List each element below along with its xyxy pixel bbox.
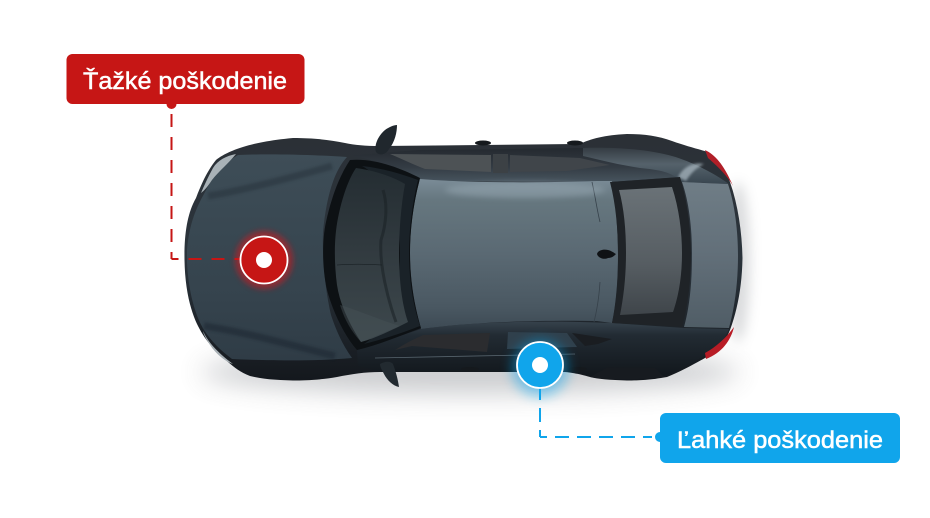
roof seam lines [592,182,600,322]
marker: severe damage [235,231,293,289]
car drop shadow [200,182,750,394]
rear quarter panel [583,148,729,184]
marker: light damage [512,340,568,396]
windshield frame [323,160,421,350]
roof highlight [445,182,605,198]
label: light damage [655,413,900,463]
upper side band [350,148,682,182]
car [184,125,742,387]
mirror: lower [380,362,399,387]
label: severe damage [66,54,304,109]
windshield dash area [362,166,420,344]
taillight: lower [705,327,734,359]
upper side windows [390,154,610,173]
lower side windows [375,332,612,358]
door handles [461,140,587,371]
mirror: upper [375,125,397,154]
label: severe damage: Ťažké poškodenie [83,68,287,95]
hood [187,154,352,360]
windshield reflections [337,190,400,342]
lower door band [357,322,729,376]
hood crease highlights [204,166,335,356]
rear window frame [610,177,691,327]
roof [410,179,618,329]
trunk [682,182,738,328]
rear lower valance [590,367,664,379]
connector: severe damage [172,114,240,259]
rear window glass [619,187,682,315]
headlight: upper [201,154,236,193]
shark fin antenna [597,250,616,259]
connector: light damage [540,388,652,437]
label: light damage: Ľahké poškodenie [677,427,883,454]
windshield glass [335,168,408,342]
quarter highlight [678,164,704,181]
car body outline [184,134,742,380]
taillight: upper [705,150,733,186]
headlight: lower [203,331,233,364]
